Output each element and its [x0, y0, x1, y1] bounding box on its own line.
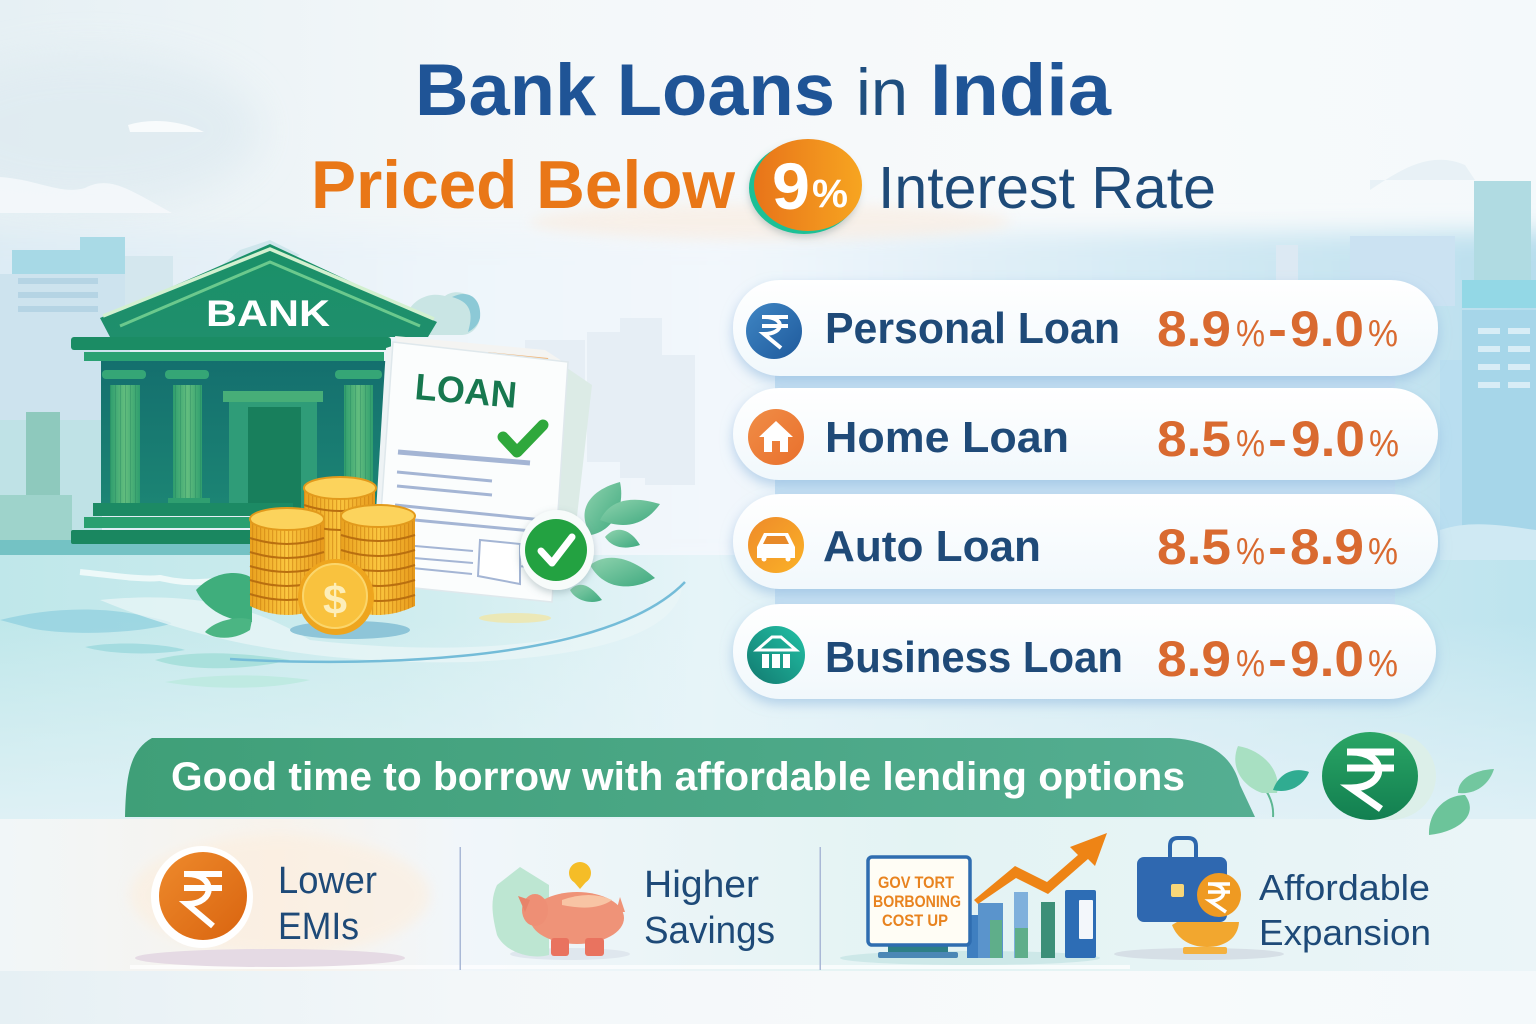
rate: 8.9%-9.0% — [1157, 301, 1398, 357]
rate: 8.5%-9.0% — [1157, 411, 1399, 467]
panel: loan rates list — [733, 280, 1438, 699]
rate: 8.5%-8.9%: 8.9 — [1290, 519, 1364, 575]
icon: briefcase with rupee and cup — [1114, 838, 1284, 960]
front dollar coin: $ — [323, 576, 347, 623]
subtitle: Priced Below 9% Interest Rate: Priced Below — [311, 147, 736, 223]
cloud behind bank — [404, 292, 480, 335]
subtitle: Priced Below 9% Interest Rate: Interest Rate — [878, 155, 1216, 221]
rate: 8.9%-9.0%: 9.0 — [1290, 301, 1364, 357]
title: Bank Loans in India — [415, 50, 1112, 131]
background: blue haze behind loan rows — [775, 300, 1395, 695]
puddle highlight — [479, 613, 551, 623]
icon: green rupee coin — [1322, 732, 1436, 820]
benefit: Lower EMIs: EMIs — [278, 906, 359, 948]
loan document: LOAN — [413, 366, 518, 416]
icon: monitor — [868, 857, 970, 958]
rate: 8.5%-9.0%: - — [1268, 411, 1287, 467]
rate: 8.9%-9.0%: % — [1236, 643, 1265, 685]
rate: 8.5%-8.9%: % — [1368, 531, 1398, 573]
banner: good time to borrow: Good time to borrow with affordable lending options — [171, 755, 1185, 799]
title: Bank Loans in India: in — [856, 55, 908, 129]
icon: monitor: COST UP — [882, 912, 948, 930]
row: Personal Loan: Personal Loan — [825, 304, 1120, 353]
shadow under coin — [290, 621, 410, 639]
row: Home Loan — [733, 388, 1438, 480]
rate: 8.5%-8.9%: % — [1236, 531, 1265, 573]
back coin stack — [304, 477, 376, 565]
right coin stack — [341, 505, 415, 615]
loan document — [376, 342, 568, 602]
rate: 8.9%-9.0%: 9.0 — [1290, 631, 1364, 687]
green check badge — [520, 510, 594, 590]
row: Personal Loan — [733, 280, 1438, 376]
row: Home Loan: Home Loan — [825, 413, 1069, 462]
back sheets of paper — [372, 336, 592, 582]
icon: monitor: GOV TORT — [878, 874, 954, 892]
row: Business Loan — [733, 604, 1436, 699]
rate: 8.9%-9.0%: - — [1268, 301, 1287, 357]
icon: rupee blue — [746, 303, 802, 359]
rate: 8.5%-9.0%: % — [1369, 423, 1399, 465]
rate: 8.5%-8.9% — [1157, 519, 1398, 575]
benefit: Higher Savings: Higher — [644, 864, 759, 906]
bank building — [71, 240, 437, 544]
subtitle: Priced Below 9% Interest Rate — [311, 139, 1216, 240]
badge: 9%: % — [812, 172, 848, 216]
background: right city skyline — [1276, 160, 1536, 545]
rate: 8.9%-9.0%: % — [1368, 313, 1398, 355]
row: Business Loan: Business Loan — [825, 633, 1123, 682]
check mark on document — [503, 425, 543, 452]
rate: 8.5%-8.9%: 8.5 — [1157, 519, 1231, 575]
rate: 8.9%-9.0%: % — [1368, 643, 1398, 685]
background: sky clouds left — [0, 55, 1536, 572]
icon: monitor: BORBONING — [873, 893, 961, 911]
banner: good time to borrow — [125, 738, 1255, 817]
background: water band — [0, 524, 1536, 819]
bank building: BANK — [206, 293, 330, 334]
rate: 8.9%-9.0%: % — [1236, 313, 1265, 355]
badge: 9%: 9 — [772, 149, 810, 223]
bar chart — [967, 890, 1096, 958]
icon: leaves beside banner — [1235, 746, 1309, 817]
benefit: Higher Savings — [492, 862, 775, 960]
title: Bank Loans in India: Bank Loans — [415, 50, 835, 131]
icon: leaves right of coin — [1429, 769, 1494, 835]
benefit: Affordable Expansion — [1114, 838, 1431, 960]
benefit: Lower EMIs: Lower — [278, 860, 377, 902]
benefit: Affordable Expansion: Affordable — [1259, 867, 1430, 908]
left coin stack — [250, 508, 324, 615]
rate: 8.9%-9.0%: - — [1268, 631, 1287, 687]
row: Auto Loan — [733, 494, 1438, 589]
arrow: rising — [974, 833, 1107, 904]
benefit: Affordable Expansion: Expansion — [1259, 912, 1431, 953]
background: center misty buildings — [525, 318, 695, 485]
rate: 8.5%-8.9%: - — [1268, 519, 1287, 575]
background: left city skyline — [0, 237, 400, 556]
illustration: bank, loan document and coins — [71, 240, 660, 639]
rate: 8.9%-9.0% — [1157, 631, 1398, 687]
icon: piggy bank — [492, 862, 630, 960]
rate: 8.5%-9.0%: 9.0 — [1291, 411, 1365, 467]
benefit: Lower EMIs — [130, 835, 430, 967]
leaves — [196, 482, 660, 638]
row: Auto Loan: Auto Loan — [823, 522, 1041, 571]
icon: bank building — [747, 626, 805, 684]
rate: 8.9%-9.0%: 8.9 — [1157, 631, 1231, 687]
rate: 8.5%-9.0%: % — [1236, 423, 1265, 465]
title: Bank Loans in India: India — [930, 50, 1112, 131]
icon: orange rupee coin — [151, 846, 253, 948]
icon: car — [748, 517, 804, 573]
rate: 8.9%-9.0%: 8.9 — [1157, 301, 1231, 357]
front dollar coin — [298, 559, 374, 635]
benefit: borrowing cost chart — [840, 833, 1107, 965]
badge: 9% — [749, 139, 862, 234]
rate: 8.5%-9.0%: 8.5 — [1157, 411, 1231, 467]
panel: benefits strip — [0, 819, 1536, 971]
benefit: Higher Savings: Savings — [644, 910, 775, 952]
icon: house — [748, 409, 804, 465]
